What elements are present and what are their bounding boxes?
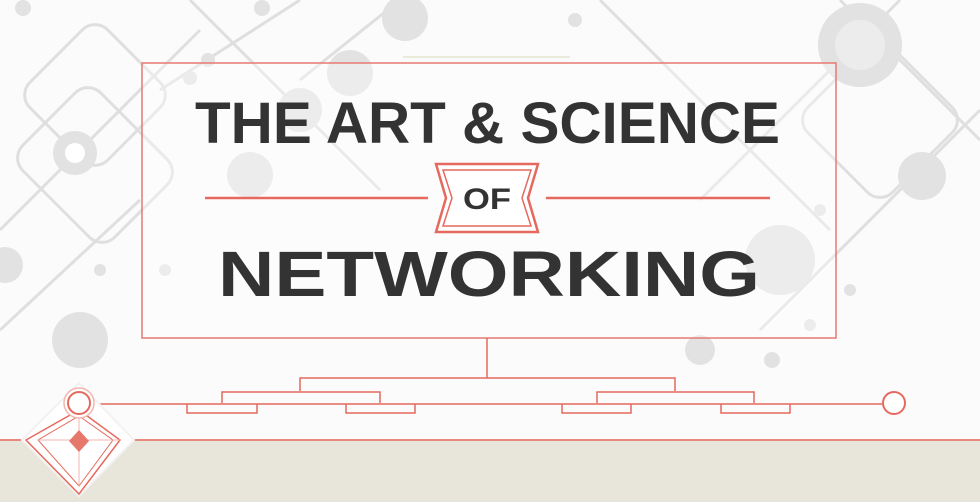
divider lines [205, 197, 770, 199]
badge: OF [436, 164, 538, 232]
title: NETWORKING: NETWORKING [218, 238, 760, 310]
title frame [142, 57, 836, 338]
background pattern [0, 0, 980, 330]
title: THE ART & SCIENCE: THE ART & SCIENCE [195, 91, 780, 156]
icon: diamond badge [22, 383, 134, 496]
badge: OF: OF [463, 183, 511, 216]
network tree diagram [92, 338, 905, 414]
